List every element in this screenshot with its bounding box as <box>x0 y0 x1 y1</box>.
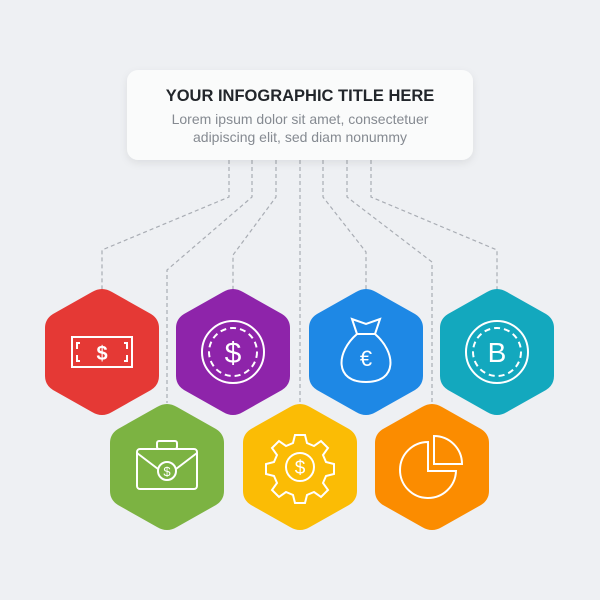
hexagon: red cash <box>45 289 159 415</box>
hexagon: yellow gear: $ <box>295 458 306 479</box>
hexagon: blue euro bag <box>309 289 423 415</box>
subtitle: Lorem ipsum dolor sit amet, consectetuer <box>172 111 429 127</box>
hexagon: blue euro bag: € <box>360 346 372 371</box>
title box: adipiscing elit, sed diam nonummy <box>193 129 407 145</box>
title: YOUR INFOGRAPHIC TITLE HERE <box>166 87 434 105</box>
hexagon: green briefcase <box>110 404 224 530</box>
hexagon: purple coin <box>176 289 290 415</box>
hexagon: teal bitcoin: B <box>488 337 506 368</box>
hexagon: red cash: $ <box>96 343 108 365</box>
hexagon: green briefcase: $ <box>163 464 171 479</box>
connector lines <box>102 160 497 403</box>
title box <box>127 70 473 160</box>
hexagon: teal bitcoin <box>440 289 554 415</box>
hexagon: yellow gear <box>243 404 357 530</box>
hexagon: orange pie chart <box>375 404 489 530</box>
hexagon: purple coin: $ <box>225 337 242 370</box>
